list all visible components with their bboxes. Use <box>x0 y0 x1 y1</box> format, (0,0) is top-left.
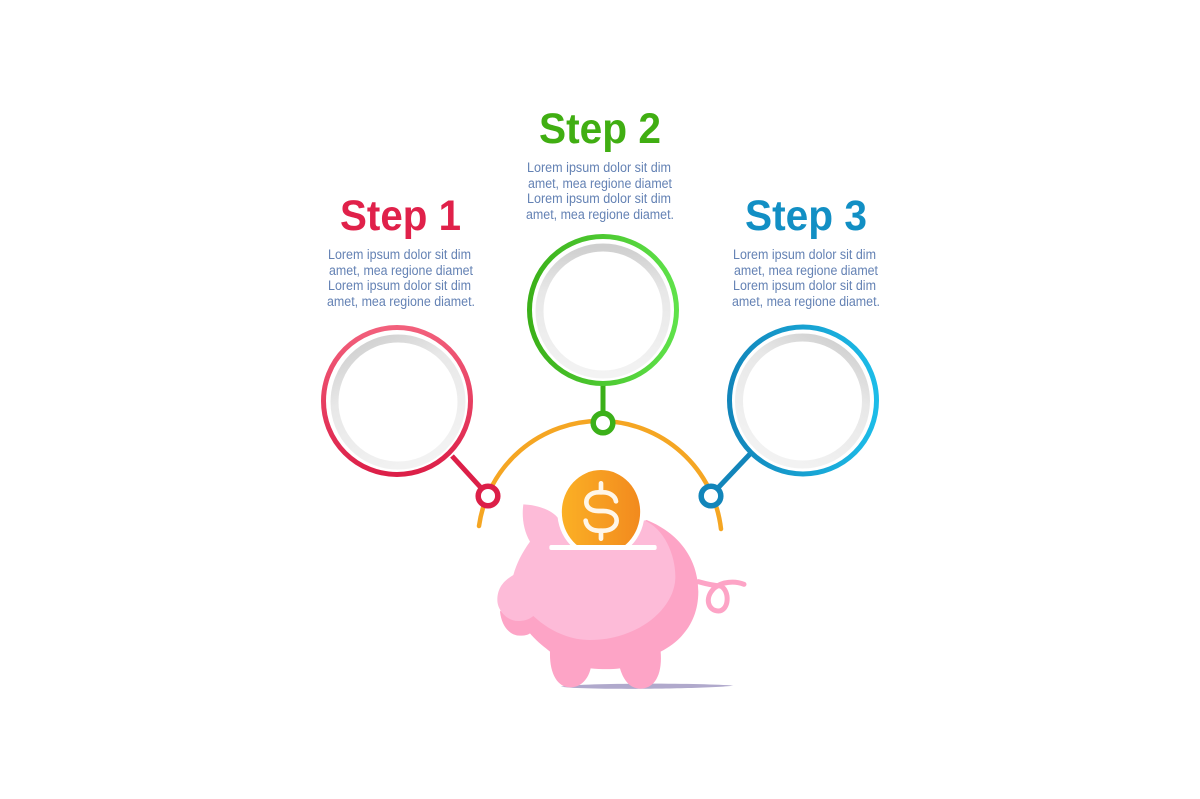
step 1 group <box>324 192 498 506</box>
infographic canvas <box>321 113 879 689</box>
text block: step 3: amet, mea regione diamet <box>734 263 878 278</box>
node: step 3 <box>701 486 721 506</box>
body shadow side <box>500 520 698 689</box>
heading: step 2: Step 2 <box>539 105 661 153</box>
body light side <box>497 504 675 640</box>
connector: step 3 <box>716 454 750 490</box>
text block: step 2: Lorem ipsum dolor sit dim <box>527 191 671 206</box>
text block: step 2: amet, mea regione diamet <box>528 176 672 191</box>
text block: step 1: Lorem ipsum dolor sit dim <box>328 247 471 262</box>
text block: step 2 <box>526 160 674 222</box>
text block: step 3: Lorem ipsum dolor sit dim <box>733 278 876 293</box>
shadow <box>561 684 733 689</box>
text block: step 3: amet, mea regione diamet. <box>732 294 880 309</box>
coin slot <box>549 545 657 550</box>
step 3 group <box>701 192 880 506</box>
coin halo <box>558 518 644 545</box>
text block: step 3: Lorem ipsum dolor sit dim <box>733 247 876 262</box>
connector: step 1 <box>452 456 483 490</box>
heading: step 3: Step 3 <box>745 192 867 240</box>
circle: step 1 <box>324 328 470 474</box>
coin <box>562 470 640 554</box>
dollar sign <box>586 483 617 539</box>
node: step 2 <box>593 413 613 433</box>
connector: step 2 <box>600 384 606 414</box>
text block: step 2: amet, mea regione diamet. <box>526 207 674 222</box>
heading: step 1: Step 1 <box>340 192 461 240</box>
circle: step 2 <box>530 236 676 384</box>
orange arc <box>479 421 721 529</box>
text block: step 1: amet, mea regione diamet <box>329 263 473 278</box>
circle: step 3 <box>730 327 876 474</box>
step 2 group <box>526 105 676 433</box>
text block: step 3 <box>732 247 880 309</box>
node: step 1 <box>478 486 498 506</box>
text block: step 2: Lorem ipsum dolor sit dim <box>527 160 671 175</box>
text block: step 1 <box>327 247 475 309</box>
tail <box>698 582 744 611</box>
text block: step 1: amet, mea regione diamet. <box>327 294 475 309</box>
icon: piggy bank with coin <box>497 466 744 689</box>
text block: step 1: Lorem ipsum dolor sit dim <box>328 278 471 293</box>
